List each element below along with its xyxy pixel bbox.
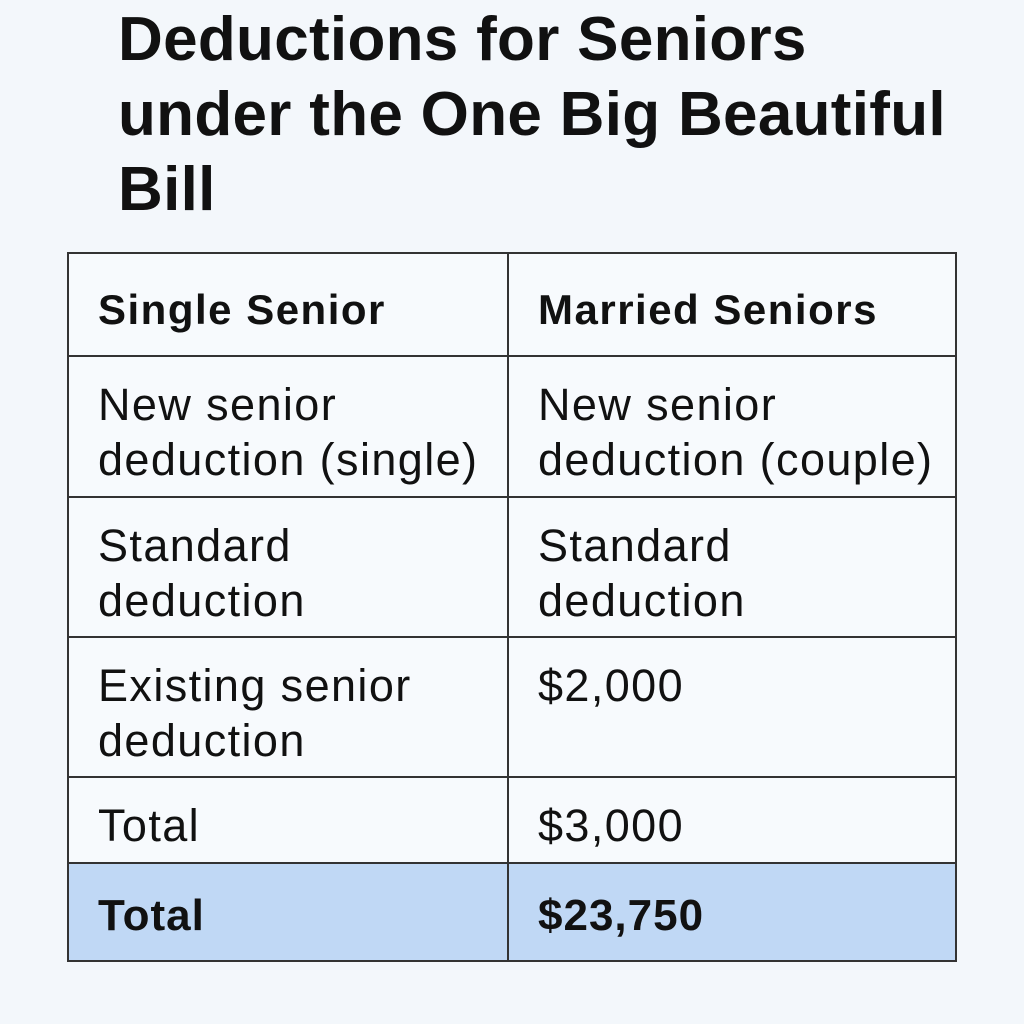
table: deductions comparison: Total <box>98 800 200 851</box>
table: deductions comparison: Married Seniors <box>538 286 878 333</box>
table: deductions comparison: $2,000 <box>538 660 684 711</box>
table: deductions comparison: deduction <box>98 715 306 766</box>
table: deductions comparison: Single Senior <box>98 286 386 333</box>
title: Bill <box>118 155 216 224</box>
table: deductions comparison: $3,000 <box>538 800 684 851</box>
title: under the One Big Beautiful <box>118 80 946 149</box>
table: deductions comparison: Standard <box>98 520 292 571</box>
table: deductions comparison: deduction <box>98 575 306 626</box>
table: deductions comparison: New senior <box>538 379 777 430</box>
table: deductions comparison: Total <box>98 891 205 940</box>
table: deductions comparison: $23,750 <box>538 891 704 940</box>
table: deductions comparison <box>67 252 957 962</box>
table: deductions comparison: Standard <box>538 520 732 571</box>
title <box>118 5 946 224</box>
table: deductions comparison: deduction (single) <box>98 434 478 485</box>
table: deductions comparison: deduction (couple) <box>538 434 933 485</box>
table: deductions comparison: New senior <box>98 379 337 430</box>
title: Deductions for Seniors <box>118 5 807 74</box>
table: deductions comparison: deduction <box>538 575 746 626</box>
table: deductions comparison: Existing senior <box>98 660 412 711</box>
